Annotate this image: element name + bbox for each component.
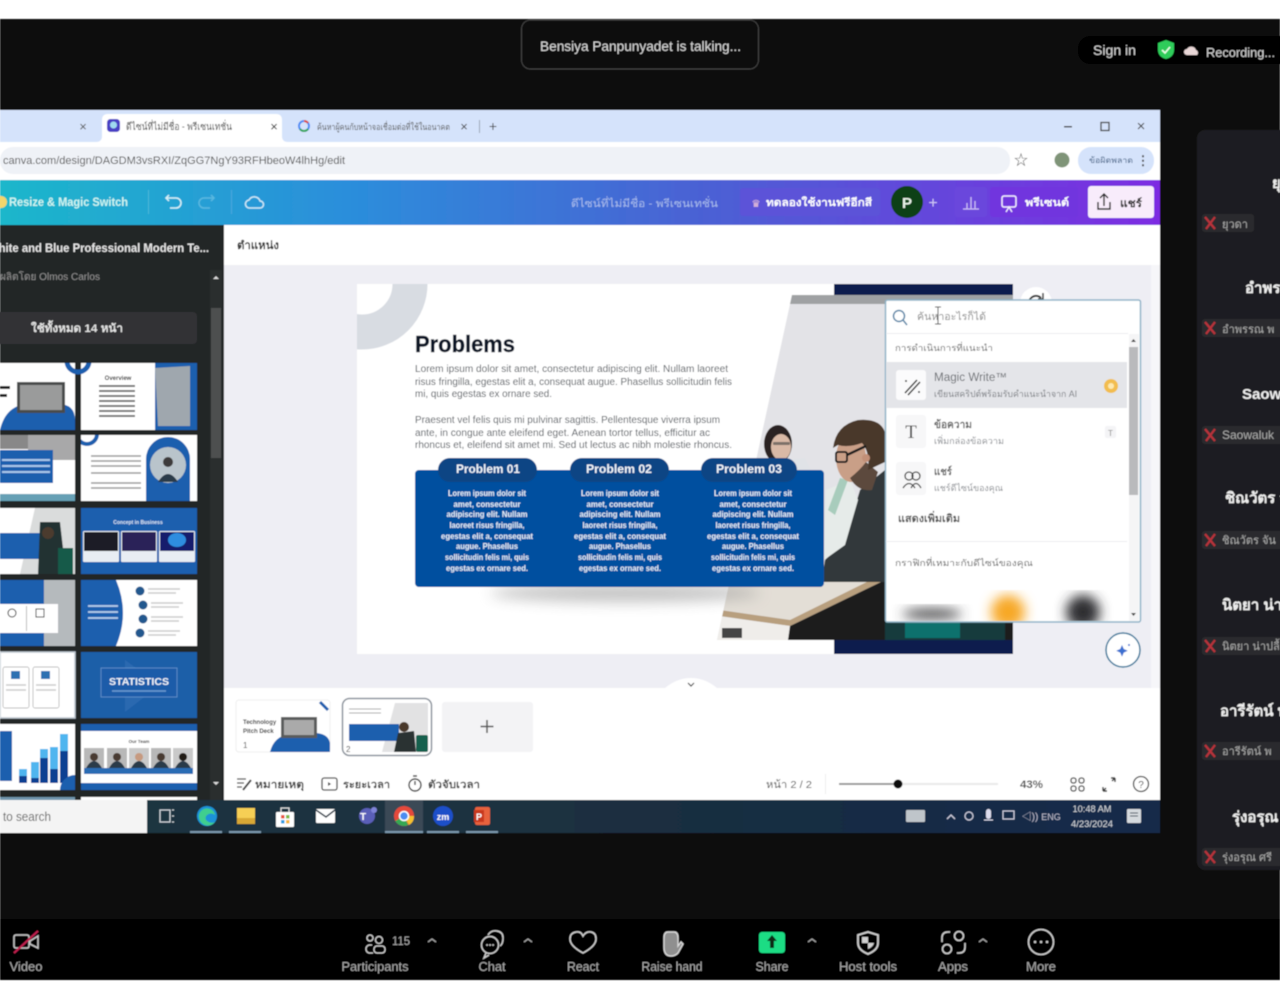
magic add-element search menu [886,300,1140,629]
rotate button behind menu [1020,287,1052,319]
address bar: ☆ [1014,152,1028,168]
notes button: หมายเหตุ [255,779,304,792]
windows search box: to search [3,810,51,824]
status pill: sign in and recording: Sign in [1093,42,1136,58]
participant tile: Saowaluk [1202,386,1280,444]
menu item: share: แชร์ดีไซน์ของคุณ [934,482,1003,494]
thumbnail: overview: Overview [105,376,132,382]
column text 1 [441,489,533,573]
column text 1: adipiscing elit. Nullam [446,510,528,519]
add page button [442,702,533,752]
column text 3: sollicitudin felis mi, quis [711,553,795,562]
office photo [717,295,1013,640]
participants gallery [1197,130,1280,870]
participant tile: Amphawan: อำพรรณ พ [1222,324,1274,336]
page strip [224,678,1160,800]
tab: problem 01 [438,458,537,482]
help icon: ? [1138,780,1144,791]
slide body text: rhoncus et, eleifend sit amet mi. Sed ut lectus ac nibh molestie rhoncus. [415,440,732,451]
thumbnail: coverage in business [81,508,197,574]
page thumbnail 1: Technology [243,720,277,726]
system tray [906,804,1141,830]
talking indicator [522,20,758,69]
template thumbnail grid [0,350,197,805]
system tray: ◁)) [1022,811,1038,823]
column text 2: laoreet risus fringilla, [582,521,658,530]
address bar: canva.com/design/DAGDM3vsRXI/ZqGG7NgY93RFHbeoW4lhHg/edit [3,155,345,167]
thumbnail: coverage in business: Concept in Business [113,520,163,526]
editor canvas area [224,265,1160,688]
host tools control: Host tools [839,960,897,974]
canva top toolbar [0,180,1160,225]
column text 1: egestas elit a, consequat [441,532,533,541]
thumbnail: technology cover [0,363,75,430]
participant tile: Yutada: ยุวดา [1222,219,1248,231]
canva top toolbar: P [902,195,912,212]
editor footer [224,770,1160,800]
address bar [0,147,1154,174]
system tray: ENG [1041,812,1061,822]
menu item: magic write [886,362,1127,408]
slide body text [415,364,732,451]
canva side panel with template thumbnails [0,225,224,805]
thumbnail: marketing strategy [81,580,197,646]
tab: problem 02: Problem 02 [586,462,652,476]
tab: problem 03 [701,458,797,482]
man with glasses [822,420,885,582]
slide body text: ante, in congue ante eleifend eget. Aenean tortor tellus, efficitur ac [415,428,710,439]
video control: Video [10,960,43,974]
powerpoint icon [466,807,498,833]
canva top toolbar: แชร์ [1120,197,1142,210]
page thumbnail 1 [236,700,330,752]
fullscreen icon [1103,778,1115,791]
show more link: แสดงเพิ่มเติม [898,510,960,525]
browser tab strip: × [460,119,468,134]
teams icon [359,807,377,824]
participants control: Participants [342,960,408,974]
menu scrollbar [1129,334,1139,621]
chrome icon [385,806,423,833]
thumbnail ring across top [64,362,92,376]
column text 3: egestas elit a, consequat [707,532,799,541]
browser tab strip: × [79,119,87,134]
panel collapse handle [224,478,234,548]
browser tab strip: ดีไซน์ที่ไม่มีชื่อ - พรีเซนเทชั่น [126,119,232,133]
canva top toolbar: ทดลองใช้งานฟรีอีกสี [766,195,873,209]
thumbnail: two cards [0,580,75,646]
store icon [276,808,294,827]
participant tile: Rungarun: รุ่งอรุณ ศรี [1222,851,1272,864]
column text 3: amet, consectetur [720,500,786,509]
participant tile: Areerat [1202,702,1280,760]
column text 3 [707,489,799,573]
system tray: 4/23/2024 [1071,819,1113,830]
woman in background [763,424,793,460]
tab: problem 02 [570,458,669,482]
task view icon [160,810,174,822]
column text 2: adipiscing elit. Nullam [580,510,660,519]
presentation slide [357,283,1014,655]
share control: Share [756,960,789,974]
page indicator: หน้า 2 / 2 [766,779,812,791]
talking indicator: Bensiya Panpunyadet is talking... [540,38,741,54]
browser window [0,110,1160,833]
editor position bar: ตำแหน่ง [237,239,279,252]
menu item: text: T [905,422,917,443]
canva side panel with template thumbnails: ผลิตโดย Olmos Carlos [0,270,100,283]
windows taskbar [0,800,1160,833]
menu item: text: T [1108,429,1113,438]
participant tile: Saowaluk: Saowaluk [1222,428,1275,442]
slide body text: mi, quis egestas ex ornare sed. [415,389,552,400]
section heading: matching graphics: กราฟิกที่เหมาะกับดีไซน์ของคุณ [895,556,1033,569]
column text 2: Lorem ipsum dolor sit [581,489,659,498]
menu item: magic write: เขียนสคริปต์พร้อมรับคำแนะนำจาก AI [934,388,1077,399]
browser tab strip: × [1137,118,1145,135]
page thumbnail 1: 1 [243,741,248,750]
duration button: ระยะเวลา [343,779,390,791]
mail icon [316,809,335,823]
slide body text: Praesent vel felis quis mi pulvinar sagittis. Pellentesque viverra ipsum [415,415,720,426]
apps control [938,932,987,974]
thumbnail: statistics [81,652,197,718]
file explorer icon [229,808,261,833]
thumbnail: bar chart [0,723,76,791]
canva top toolbar: ♛ [752,199,760,210]
participant tile: Yutada [1202,175,1280,232]
system tray: 10:48 AM [1072,804,1112,815]
table [724,582,866,620]
column text 1: egestas ex ornare sed. [446,564,528,573]
page count button [0,312,197,344]
canva top toolbar: + [928,195,938,212]
participant tile: Amphawan [1202,280,1280,337]
host tools control [839,932,897,974]
zoom icon [427,806,459,833]
help icon [1134,776,1148,792]
address bar: ข้อผิดพลาด [1089,156,1133,165]
browser tab strip: + [489,118,497,134]
participant tile: Chinnawat: ชิณวัตร จัน [1222,535,1276,547]
search field: ค้นหาอะไรก็ได้ [917,309,986,323]
thumbnail: our team: Our Team [129,739,149,744]
column text 2 [574,489,666,573]
page count button: ใช้ทั้งหมด 14 หน้า [31,320,123,335]
participant tile: Chinnawat [1202,489,1280,549]
menu item: text: เพิ่มกล่องข้อความ [934,434,1004,446]
raise hand control [642,932,703,974]
thumbnail: introduction [0,435,75,501]
column text 2: augue. Phasellus [589,542,652,551]
meeting control bar [0,919,1280,980]
address bar: ⋮ [1136,153,1150,168]
react control [567,932,600,974]
react control: React [567,960,600,974]
canva top toolbar: Resize & Magic Switch [9,197,128,209]
column text 3: adipiscing elit. Nullam [712,510,794,519]
section heading: suggested actions: การดำเนินการที่แนะนำ [895,341,993,353]
panel shadow [490,584,760,602]
column text 1: augue. Phasellus [456,542,519,551]
page thumbnail 2 selected [342,698,432,756]
menu item: share [896,462,1003,495]
browser tab strip [0,110,1160,142]
grid view icon [1071,778,1084,791]
column text 3: egestas ex ornare sed. [712,564,794,573]
thumbnail: overview [81,363,197,430]
column text 2: egestas ex ornare sed. [579,564,661,573]
windows search box [0,800,147,833]
tab: problem 01: Problem 01 [456,462,520,476]
menu item: share: แชร์ [934,465,952,478]
more control [1026,930,1056,974]
page thumbnail 1: Pitch Deck [243,729,274,735]
chat control [478,931,532,974]
chat control: Chat [478,960,506,974]
more control: More [1026,960,1056,974]
duration button [322,778,390,791]
column text 3: augue. Phasellus [722,542,785,551]
navy background block [834,284,1014,654]
column text 1: laoreet risus fringilla, [450,521,524,530]
thumbnail: problems [0,508,75,574]
column text 2: sollicitudin felis mi, quis [578,553,662,562]
column text 3: Lorem ipsum dolor sit [714,489,792,498]
column text 1: Lorem ipsum dolor sit [448,489,526,498]
participants control [342,934,436,974]
menu item: text: ข้อความ [934,418,972,431]
participant tile: Nittaya [1202,593,1280,655]
blurred graphic suggestions [902,595,1100,629]
video control [10,931,43,974]
teal chair under panel [885,622,1005,640]
column text 1: sollicitudin felis mi, quis [445,553,529,562]
raise hand control: Raise hand [642,960,703,974]
zoom icon: zm [437,812,449,822]
magic assistant button [1106,633,1140,667]
powerpoint icon: P [476,812,482,822]
slide body text: Lorem ipsum dolor sit amet, consectetur adipiscing elit. Nullam laoreet [415,364,728,375]
page thumbnail 2 selected: 2 [346,745,351,754]
menu item: text [896,415,1116,448]
browser tab strip: ค้นหาผู้คนกับหน้าจอเชื่อมต่อที่ใช้ในอนาคต [317,120,450,133]
canva top toolbar: พรีเซนต์ [1025,196,1069,209]
browser tab strip: × [270,119,278,134]
status pill: sign in and recording: Recording... [1206,45,1275,60]
slide body text: risus fringilla, egestas elit a, consequat augue. Phasellus sollicitudin felis [415,377,732,388]
column text 3: laoreet risus fringilla, [716,521,790,530]
column text 1: amet, consectetur [454,500,520,509]
problems blue panel [415,458,824,587]
tab: problem 03: Problem 03 [716,462,782,476]
thumbnail: services selected [0,652,75,718]
zoom percent: 43% [1020,779,1043,791]
participants control: 115 [392,934,410,948]
participant tile: Areerat: อารีรัตน์ พ [1222,745,1272,758]
status pill: sign in and recording [1078,36,1280,64]
column text 2: egestas elit a, consequat [574,532,666,541]
share control [756,932,816,974]
decorative ring [356,284,428,350]
thumbnail: our team [81,724,197,790]
zoom slider [839,780,998,788]
apps control: Apps [938,960,968,974]
teams icon: T [360,812,366,823]
column text 2: amet, consectetur [586,500,654,509]
notes button [237,779,304,792]
participant tile: Rungarun [1202,809,1280,866]
timer button: ตัวจับเวลา [428,779,480,791]
thumbnail: statistics: STATISTICS [109,677,169,688]
timer button [409,776,480,791]
menu item: magic write: Magic Write™ [934,372,1007,384]
editor position bar [224,225,1160,265]
slide title: Problems [415,331,515,357]
edge icon [190,806,222,833]
search field [894,307,986,325]
thumbnail: about us [80,434,198,502]
canva top toolbar: ดีไซน์ที่ไม่มีชื่อ - พรีเซนเทชั่น [571,196,718,210]
